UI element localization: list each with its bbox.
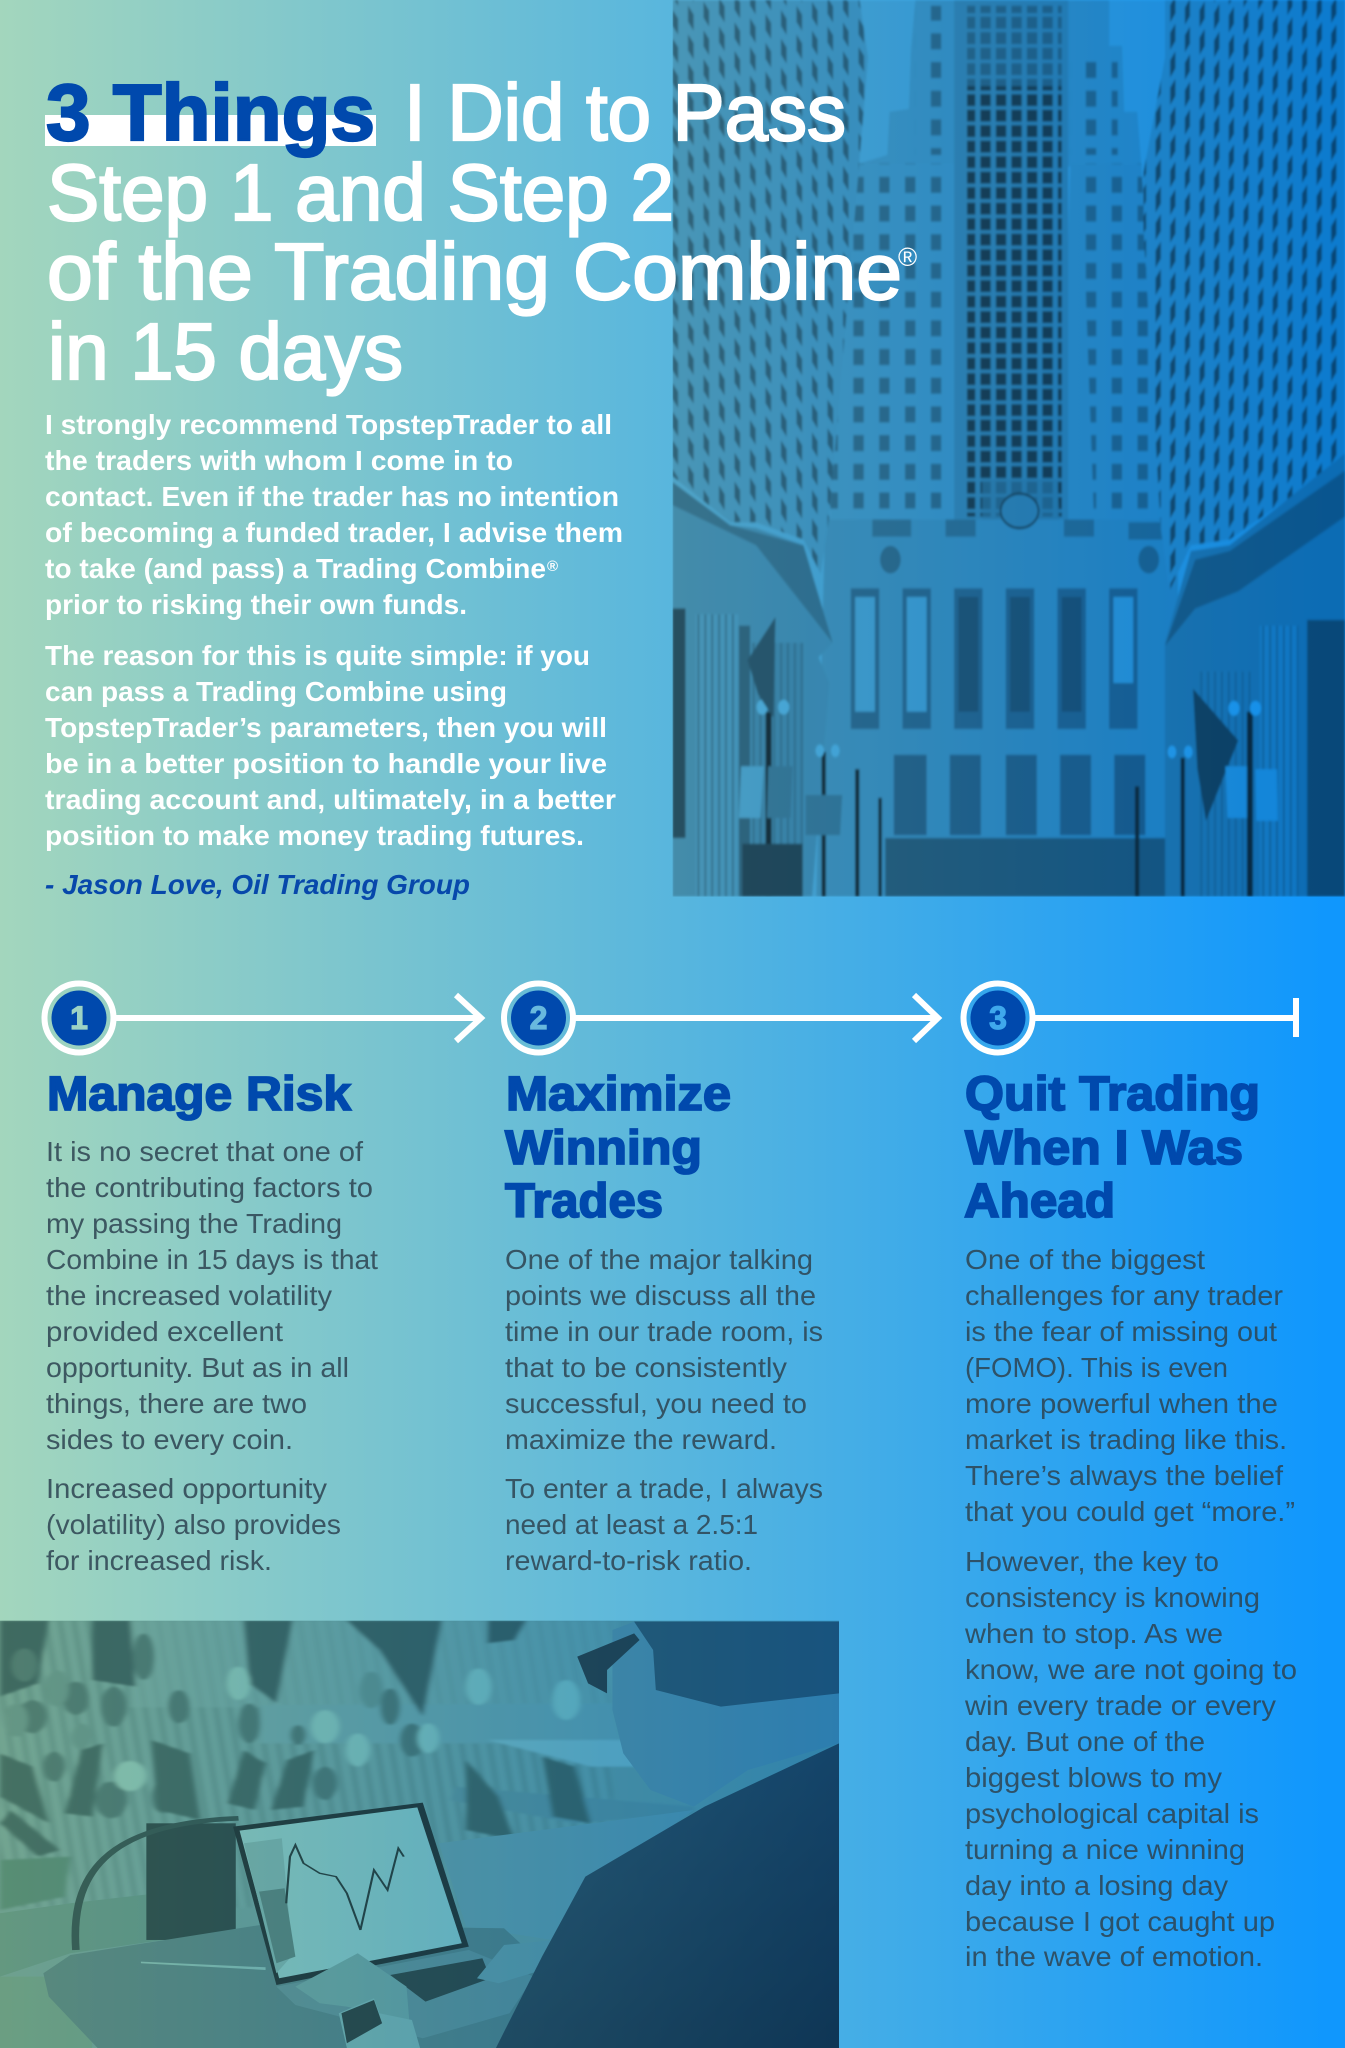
heading: Ahead xyxy=(964,1175,1115,1228)
body text: One of the major talking xyxy=(505,1244,813,1275)
body text: market is trading like this. xyxy=(965,1424,1287,1455)
body text: Combine in 15 days is that xyxy=(46,1244,378,1275)
step 1 timeline: badge and arrow: 1 xyxy=(70,1000,88,1036)
body text: psychological capital is xyxy=(965,1798,1259,1829)
body text: that you could get “more.” xyxy=(965,1496,1295,1527)
intro text block: ® xyxy=(547,558,558,575)
body text: consistency is knowing xyxy=(965,1582,1260,1613)
intro text block: trading account and, ultimately, in a better xyxy=(45,784,616,815)
body text: One of the biggest xyxy=(965,1244,1205,1275)
intro text block: TopstepTrader’s parameters, then you will xyxy=(45,712,607,743)
intro text block: the traders with whom I come in to xyxy=(45,445,513,476)
title highlight bar xyxy=(45,115,376,146)
body text: because I got caught up xyxy=(965,1906,1275,1937)
step 3 timeline: badge and end bar: 3 xyxy=(989,1000,1007,1036)
body text: challenges for any trader xyxy=(965,1280,1283,1311)
body text: maximize the reward. xyxy=(505,1424,777,1455)
body text: However, the key to xyxy=(965,1546,1219,1577)
photo: trader at laptop among tulips xyxy=(0,1621,839,2048)
heading xyxy=(505,1068,731,1228)
heading: Manage Risk xyxy=(47,1068,351,1121)
body text: day into a losing day xyxy=(965,1870,1228,1901)
heading: When I Was xyxy=(965,1122,1243,1175)
title: Step 1 and Step 2 xyxy=(47,148,674,237)
column 1: Manage Risk xyxy=(46,1068,378,1576)
intro text block: prior to risking their own funds. xyxy=(45,589,467,620)
body text: turning a nice winning xyxy=(965,1834,1245,1865)
column 2: Maximize Winning Trades xyxy=(505,1068,823,1576)
body text: when to stop. As we xyxy=(964,1618,1223,1649)
body text: Increased opportunity xyxy=(46,1473,327,1504)
heading: Quit Trading xyxy=(965,1068,1260,1121)
body text: sides to every coin. xyxy=(46,1424,293,1455)
intro text block: position to make money trading futures. xyxy=(45,820,584,851)
body text: day. But one of the xyxy=(965,1726,1205,1757)
intro text block: of becoming a funded trader, I advise them xyxy=(45,517,623,548)
body text: the increased volatility xyxy=(46,1280,332,1311)
intro text block xyxy=(45,409,623,851)
photo: Chicago Board of Trade building xyxy=(673,0,1345,897)
heading: Maximize xyxy=(506,1068,731,1121)
body text: the contributing factors to xyxy=(46,1172,373,1203)
body text: There’s always the belief xyxy=(965,1460,1283,1491)
body text: provided excellent xyxy=(46,1316,283,1347)
body text: time in our trade room, is xyxy=(505,1316,823,1347)
title: 3 Things xyxy=(46,68,375,157)
heading: Winning xyxy=(505,1122,702,1175)
step 1 timeline: badge and arrow xyxy=(44,984,481,1052)
title: ® xyxy=(898,242,917,272)
intro text block: I strongly recommend TopstepTrader to all xyxy=(45,409,612,440)
body text: biggest blows to my xyxy=(965,1762,1222,1793)
body text xyxy=(46,1136,378,1576)
body text: (volatility) also provides xyxy=(46,1509,341,1540)
step 2 timeline: badge and arrow xyxy=(504,984,938,1052)
body text: for increased risk. xyxy=(46,1545,272,1576)
title: of the Trading Combine xyxy=(47,227,902,316)
body text: opportunity. But as in all xyxy=(46,1352,349,1383)
intro text block: be in a better position to handle your live xyxy=(45,748,607,779)
heading xyxy=(964,1068,1260,1228)
intro text block: contact. Even if the trader has no intention xyxy=(45,481,619,512)
body text: is the fear of missing out xyxy=(965,1316,1277,1347)
step 2 timeline: badge and arrow: 2 xyxy=(530,1000,547,1036)
body text: things, there are two xyxy=(46,1388,307,1419)
body text: in the wave of emotion. xyxy=(965,1941,1263,1972)
body text: that to be consistently xyxy=(505,1352,787,1383)
author attribution: - Jason Love, Oil Trading Group xyxy=(45,869,470,900)
title: in 15 days xyxy=(48,307,403,396)
body text: need at least a 2.5:1 xyxy=(505,1509,758,1540)
column 3: Quit Trading When I Was Ahead xyxy=(964,1068,1297,1972)
title: I Did to Pass xyxy=(404,68,846,157)
body text xyxy=(964,1244,1297,1972)
intro text block: to take (and pass) a Trading Combine xyxy=(45,553,546,584)
body text: my passing the Trading xyxy=(46,1208,342,1239)
body text: To enter a trade, I always xyxy=(505,1473,823,1504)
step 3 timeline: badge and end bar xyxy=(964,984,1299,1052)
body text: It is no secret that one of xyxy=(46,1136,363,1167)
body text: (FOMO). This is even xyxy=(965,1352,1228,1383)
body text xyxy=(505,1244,823,1576)
title xyxy=(45,68,917,396)
body text: reward-to-risk ratio. xyxy=(505,1545,752,1576)
intro text block: can pass a Trading Combine using xyxy=(45,676,507,707)
body text: win every trade or every xyxy=(964,1690,1276,1721)
body text: points we discuss all the xyxy=(505,1280,816,1311)
intro text block: The reason for this is quite simple: if you xyxy=(45,640,590,671)
heading: Trades xyxy=(505,1175,663,1228)
body text: more powerful when the xyxy=(965,1388,1278,1419)
body text: successful, you need to xyxy=(505,1388,807,1419)
body text: know, we are not going to xyxy=(965,1654,1297,1685)
